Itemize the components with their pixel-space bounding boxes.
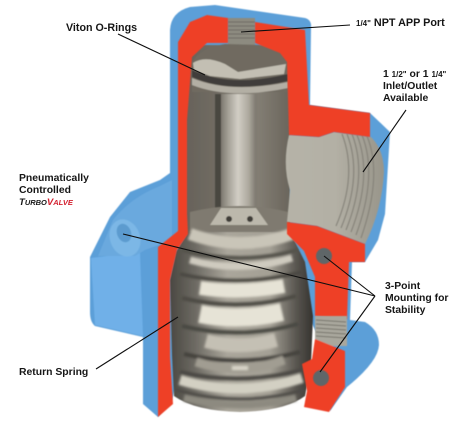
label: inlet outlet: 1 1/2" or 1 1/4" — [383, 69, 446, 80]
mounting holes in red block — [313, 248, 332, 386]
label: pneumatically controlled: Controlled — [19, 185, 71, 196]
label: TurboValve: TURBOVALVE — [19, 197, 74, 208]
threaded mounting hole — [302, 316, 347, 412]
threaded port — [228, 18, 255, 46]
return spring — [170, 232, 313, 412]
leader lines — [96, 25, 406, 372]
flange face — [91, 252, 143, 336]
red section: mount block — [287, 222, 365, 319]
label: return spring: Return Spring — [19, 367, 88, 378]
mounting hole — [104, 215, 146, 261]
label: 3-point mounting: Stability — [385, 305, 426, 316]
red section: top and left wall — [158, 15, 228, 417]
piston head — [192, 44, 288, 93]
blue valve body — [90, 5, 390, 417]
stem base — [190, 206, 290, 238]
label: inlet outlet: Inlet/Outlet — [383, 81, 438, 92]
label: 3-point mounting: Mounting for — [385, 293, 448, 304]
internal bore and piston — [186, 18, 290, 238]
label: Viton O-Rings: Viton O-Rings — [66, 22, 137, 34]
inlet outlet pipe — [286, 132, 384, 244]
label: pneumatically controlled: Pneumatically — [19, 173, 89, 184]
red section: top right wall — [255, 22, 370, 137]
upper flange shading — [98, 180, 172, 256]
label: 3-point mounting: 3-Point — [385, 281, 420, 292]
label: APP port: 1/4" NPT APP Port — [356, 17, 445, 29]
piston stem — [220, 94, 256, 216]
label: inlet outlet: Available — [383, 93, 428, 104]
red cut section — [158, 15, 370, 417]
